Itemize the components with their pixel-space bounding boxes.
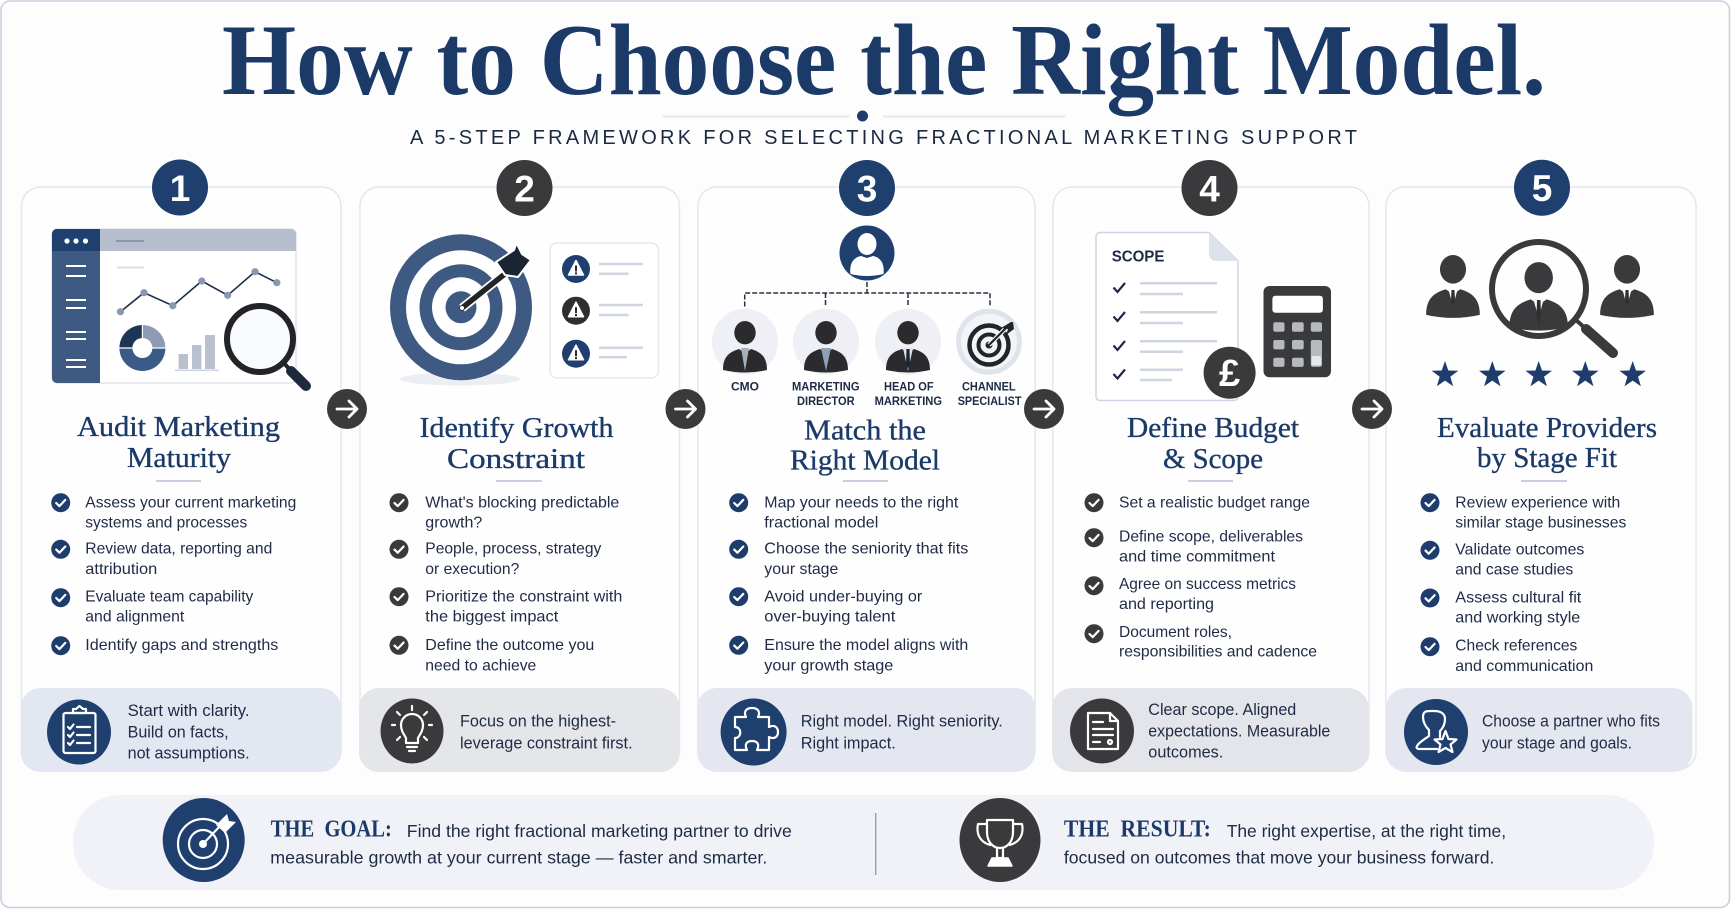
bullet: similar stage businesses — [1455, 515, 1626, 532]
bullet: and case studies — [1455, 561, 1573, 578]
bullet — [729, 587, 923, 626]
result block: THE RESULT: — [1064, 817, 1211, 843]
bullet: Check references — [1455, 638, 1577, 655]
illustration: calculator — [1264, 286, 1331, 377]
callout step 4: outcomes. — [1148, 744, 1223, 762]
callout step 2: Focus on the highest- — [460, 713, 616, 731]
panel: step 4 define budget and scope — [1052, 160, 1369, 772]
bullet: growth? — [425, 514, 482, 531]
bullet: attribution — [85, 561, 157, 578]
callout step 5: Choose a partner who fits — [1482, 713, 1660, 731]
bullet: Define the outcome you — [425, 637, 594, 654]
heading: Match the Right Model: Match the — [804, 414, 926, 446]
step number 2 — [496, 160, 552, 216]
callout step 3: Right impact. — [801, 734, 896, 752]
heading: Evaluate Providers by Stage Fit — [1437, 412, 1657, 474]
callout step 1 — [20, 688, 341, 772]
bullet: Review data, reporting and — [85, 541, 272, 558]
bullet: Agree on success metrics — [1119, 576, 1296, 593]
bullet: People, process, strategy — [425, 541, 601, 558]
goal block: THE GOAL: — [271, 817, 392, 843]
illustration: target with dart — [390, 234, 532, 386]
result block: The right expertise, at the right time, — [1227, 821, 1506, 841]
step number 3 — [839, 160, 895, 216]
goal block: Find the right fractional marketing partner to drive — [407, 821, 792, 841]
heading: Match the Right Model — [790, 414, 940, 476]
bullet: and working style — [1455, 609, 1580, 626]
arrow 3 to 4 — [1024, 389, 1064, 429]
bullet: fractional model — [764, 514, 878, 531]
step number 1 — [152, 160, 208, 216]
step number 2: 2 — [514, 168, 535, 210]
bullet — [390, 636, 594, 674]
callout step 4 — [1052, 688, 1368, 772]
icon: light bulb — [380, 698, 444, 764]
bullet: Map your needs to the right — [764, 494, 959, 511]
bullet: Avoid under-buying or — [764, 589, 923, 606]
icon: trophy — [960, 798, 1040, 882]
bullet: Review experience with — [1455, 494, 1620, 511]
icon: clipboard — [47, 700, 111, 764]
title divider with dot — [662, 110, 1066, 122]
bottom banner — [73, 795, 1654, 890]
bullet: over-buying talent — [764, 609, 896, 626]
role: CMO: CMO — [731, 382, 759, 394]
heading: Audit Marketing Maturity — [77, 411, 280, 474]
step number 5 — [1514, 160, 1570, 216]
heading: Audit Marketing Maturity: Audit Marketing — [77, 411, 280, 443]
icon: goal target — [163, 798, 245, 882]
arrow 4 to 5 — [1352, 389, 1392, 429]
bullet: Assess your current marketing — [85, 494, 296, 511]
bullet: Evaluate team capability — [85, 589, 253, 606]
callout step 3 — [697, 688, 1035, 772]
callout step 5: your stage and goals. — [1482, 734, 1632, 752]
callout step 1: not assumptions. — [128, 745, 250, 763]
panel: step 3 match the right model — [697, 160, 1035, 772]
arrow 2 to 3 — [666, 389, 706, 429]
bullet: Choose the seniority that fits — [764, 541, 968, 558]
heading: Evaluate Providers by Stage Fit: by Stage Fit — [1477, 442, 1617, 474]
icon: document — [1070, 698, 1134, 764]
result block — [960, 798, 1506, 882]
role: Channel Specialist — [956, 309, 1022, 408]
bullet — [51, 588, 253, 626]
heading: Identify Growth Constraint: Identify Growth — [420, 412, 614, 444]
checklist step 3 — [729, 493, 968, 674]
icon: pound coin — [1204, 347, 1256, 399]
heading: Identify Growth Constraint: Constraint — [447, 443, 585, 475]
role: Marketing Director: DIRECTOR — [797, 396, 855, 408]
panel: step 2 identify growth constraint — [359, 160, 680, 772]
bullet — [729, 636, 968, 674]
bullet — [1420, 588, 1582, 626]
role: Head of Marketing — [875, 309, 942, 408]
panel: step 5 evaluate providers by stage fit — [1386, 160, 1696, 772]
bullet — [390, 493, 619, 531]
callout step 4: Clear scope. Aligned — [1148, 701, 1296, 719]
illustration: scope document — [1096, 232, 1238, 400]
illustration: candidates under magnifier — [1426, 242, 1654, 353]
bullet: What's blocking predictable — [425, 494, 619, 511]
icon: puzzle piece — [721, 698, 787, 766]
bullet: and time commitment — [1119, 549, 1276, 566]
step number 4: 4 — [1199, 168, 1220, 210]
heading: Define Budget and Scope: Define Budget — [1127, 412, 1299, 444]
bullet: Document roles, — [1119, 624, 1232, 641]
heading: Audit Marketing Maturity: Maturity — [127, 442, 231, 474]
goal block — [163, 798, 792, 882]
step number 3: 3 — [857, 168, 877, 210]
checklist step 4 — [1084, 493, 1317, 661]
heading: Match the Right Model: Right Model — [790, 444, 940, 476]
callout step 1: Build on facts, — [128, 723, 229, 741]
role: CMO — [712, 309, 778, 394]
bullet — [51, 493, 296, 531]
bullet: your growth stage — [764, 657, 893, 674]
role: Marketing Director — [792, 309, 860, 408]
checklist step 5 — [1420, 493, 1626, 675]
bullet: and reporting — [1119, 596, 1214, 613]
heading: Define Budget and Scope: & Scope — [1163, 443, 1263, 475]
callout step 5 — [1386, 688, 1692, 772]
callout step 2: leverage constraint first. — [460, 734, 633, 752]
bullet — [1420, 493, 1626, 532]
bullet — [729, 540, 968, 578]
bullet: Define scope, deliverables — [1119, 529, 1303, 546]
bullet: and communication — [1455, 658, 1593, 675]
heading: Define Budget and Scope — [1127, 412, 1299, 475]
role: Marketing Director: MARKETING — [792, 382, 860, 394]
bullet: Prioritize the constraint with — [425, 589, 622, 606]
icon: user with star — [1404, 699, 1468, 765]
bullet: or execution? — [425, 561, 519, 578]
bullet: systems and processes — [85, 514, 247, 531]
heading: Evaluate Providers by Stage Fit: Evaluate Providers — [1437, 412, 1657, 444]
step number 5: 5 — [1532, 168, 1552, 209]
bullet — [1420, 637, 1593, 675]
icon: warning — [562, 340, 590, 368]
bullet — [729, 493, 959, 531]
illustration: analytics dashboard with magnifier — [52, 229, 306, 386]
rating stars — [1432, 361, 1646, 386]
bullet — [51, 540, 272, 578]
role: Head of Marketing: HEAD OF — [884, 382, 934, 394]
icon: pound coin: £ — [1219, 353, 1240, 395]
arrow 1 to 2 — [327, 389, 367, 429]
panel: warning list — [550, 243, 658, 378]
bullet: the biggest impact — [425, 609, 559, 626]
bullet: Assess cultural fit — [1455, 589, 1582, 606]
bullet: Validate outcomes — [1455, 541, 1584, 558]
role: Head of Marketing: MARKETING — [875, 396, 942, 408]
panel: step 1 audit marketing maturity — [20, 160, 341, 772]
bullet — [390, 587, 622, 626]
role: Channel Specialist: SPECIALIST — [958, 396, 1022, 408]
goal block: measurable growth at your current stage — faster and smarter. — [270, 847, 767, 867]
bullet: Identify gaps and strengths — [85, 637, 278, 654]
bullet — [1084, 528, 1303, 566]
icon: warning — [562, 297, 590, 325]
step number 4 — [1182, 160, 1238, 216]
heading: Identify Growth Constraint — [420, 412, 614, 475]
bullet: Set a realistic budget range — [1119, 494, 1310, 511]
illustration: scope document: SCOPE — [1112, 249, 1165, 266]
bullet: need to achieve — [425, 657, 536, 674]
org chart connectors — [745, 282, 990, 306]
callout step 4: expectations. Measurable — [1148, 723, 1330, 741]
title: How to Choose the Right Model. — [222, 4, 1546, 117]
bullet: Ensure the model aligns with — [764, 637, 968, 654]
bullet: and alignment — [85, 609, 185, 626]
bullet — [390, 540, 601, 578]
bullet — [1420, 541, 1584, 578]
bullet — [1084, 624, 1317, 661]
role: Channel Specialist: CHANNEL — [962, 382, 1016, 394]
checklist step 1 — [51, 493, 296, 655]
bullet: your stage — [764, 561, 838, 578]
callout step 2 — [359, 688, 680, 772]
icon: lead person — [840, 226, 894, 280]
bullet: responsibilities and cadence — [1119, 644, 1317, 661]
callout step 3: Right model. Right seniority. — [801, 713, 1003, 731]
result block: focused on outcomes that move your business forward. — [1064, 847, 1494, 867]
checklist step 2 — [390, 493, 622, 674]
icon: warning — [562, 255, 590, 283]
subtitle: A 5-STEP FRAMEWORK FOR SELECTING FRACTIONAL MARKETING SUPPORT — [410, 127, 1357, 149]
callout step 1: Start with clarity. — [128, 702, 250, 720]
bullet — [1084, 576, 1296, 613]
step number 1: 1 — [170, 168, 190, 209]
